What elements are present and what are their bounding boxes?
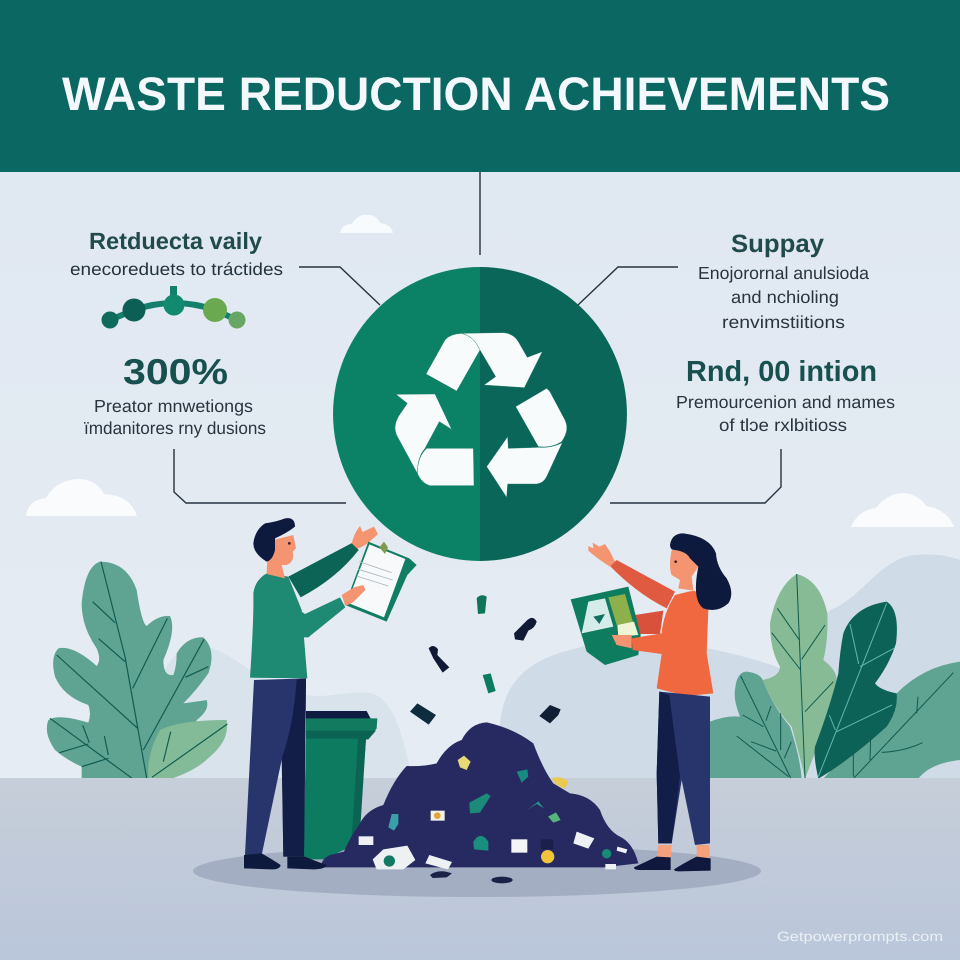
left text panel xyxy=(70,228,283,438)
right description top: Enojorornal anulsioda xyxy=(698,263,869,283)
neck and face xyxy=(267,535,296,578)
front arm xyxy=(262,590,345,637)
eye xyxy=(288,542,291,545)
cloud: left xyxy=(26,479,137,516)
recycling bin xyxy=(303,711,377,859)
face xyxy=(670,550,698,591)
front hand xyxy=(612,635,632,648)
person: man with clipboard xyxy=(244,518,417,869)
left heading: Retduecta vaily xyxy=(89,228,262,254)
right description top: renvimstiitions xyxy=(722,312,845,332)
left description xyxy=(84,396,266,438)
left stat: 300% xyxy=(123,351,228,392)
icon: molecule chain xyxy=(102,286,246,328)
ground shadow xyxy=(193,845,761,897)
raised hand xyxy=(588,543,615,567)
eye xyxy=(674,560,677,563)
torso xyxy=(250,573,307,678)
shoes xyxy=(634,857,711,871)
cloud: top xyxy=(340,215,393,233)
clipboard xyxy=(345,542,417,622)
title: WASTE REDUCTION ACHIEVEMENTS xyxy=(62,67,890,120)
raised hand xyxy=(352,526,378,549)
plant: right leaves xyxy=(706,574,960,779)
back arm xyxy=(610,560,675,608)
right description bottom xyxy=(676,392,895,435)
left subheading: enecoreduets to tráctides xyxy=(70,259,283,279)
trash pile xyxy=(321,595,638,883)
right description bottom: of tlɔe rxlbitioss xyxy=(719,415,847,435)
left description: ïmdanitores rny dusions xyxy=(84,418,266,438)
background hills xyxy=(130,554,960,778)
header banner xyxy=(0,0,960,172)
hair xyxy=(253,518,295,562)
right heading: Suppay xyxy=(731,230,824,258)
left description: Preator mnwetiongs xyxy=(94,396,253,416)
plant: left leaves xyxy=(47,562,227,778)
watermark: Getpowerprompts.com xyxy=(777,929,943,944)
recycling circle xyxy=(333,267,627,561)
front hand xyxy=(342,585,365,606)
ground xyxy=(0,778,960,960)
right text panel xyxy=(676,230,895,435)
trousers xyxy=(245,678,306,857)
back arm xyxy=(288,543,359,597)
connector lines xyxy=(174,172,781,503)
right description bottom: Premourcenion and mames xyxy=(676,392,895,412)
right stat: Rnd, 00 intion xyxy=(686,356,877,388)
recycling package xyxy=(571,587,641,665)
right description top xyxy=(698,263,869,332)
icon: recycle arrows xyxy=(395,333,567,497)
ankles xyxy=(657,845,710,858)
cloud: right xyxy=(851,493,954,527)
shoes xyxy=(244,853,327,869)
torso xyxy=(632,591,713,696)
background sky xyxy=(0,172,960,782)
trousers xyxy=(657,692,710,845)
hair xyxy=(670,533,731,610)
person: woman with package xyxy=(571,533,731,871)
right description top: and nchioling xyxy=(731,287,839,307)
